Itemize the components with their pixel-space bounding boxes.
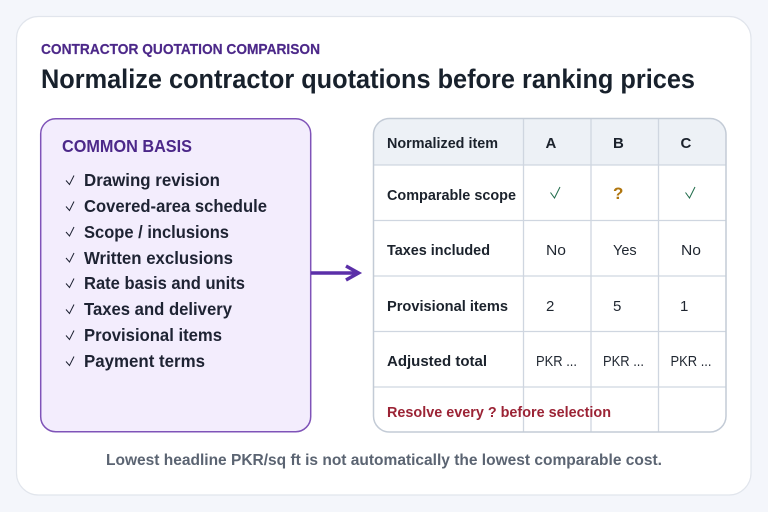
table header: Normalized item <box>387 136 498 152</box>
row: provisional items: 2 <box>546 298 554 315</box>
row: comparable scope: Comparable scope <box>387 188 516 204</box>
table header: C <box>680 135 692 152</box>
row: adjusted total: PKR ... <box>536 353 577 370</box>
footer note: Lowest headline PKR/sq ft is not automatically the lowest comparable cost. <box>106 452 662 469</box>
row: taxes included: Taxes included <box>387 243 490 259</box>
table header <box>387 135 692 152</box>
row: provisional items: 1 <box>680 298 688 315</box>
eyebrow heading: CONTRACTOR QUOTATION COMPARISON <box>41 41 320 58</box>
row: provisional items: 5 <box>613 298 621 315</box>
warning note: Resolve every ? before selection <box>387 405 611 421</box>
row: adjusted total: PKR ... <box>670 353 712 370</box>
row: taxes included: No <box>681 242 701 259</box>
row: provisional items <box>387 298 688 315</box>
panel: common basis <box>41 119 311 432</box>
checklist: Drawing revision <box>84 170 220 190</box>
checklist: Rate basis and units <box>84 273 245 293</box>
checklist: Written exclusions <box>84 248 233 268</box>
title: Normalize contractor quotations before ranking prices <box>41 64 695 94</box>
row: taxes included: No <box>546 242 566 259</box>
row: taxes included <box>387 242 701 259</box>
row: comparable scope <box>387 184 695 204</box>
checklist <box>66 170 267 371</box>
row: taxes included: Yes <box>613 243 637 259</box>
table header: A <box>546 135 556 152</box>
row: adjusted total: PKR ... <box>603 353 644 370</box>
checklist: Scope / inclusions <box>84 222 229 242</box>
table header: B <box>613 135 624 152</box>
row: provisional items: Provisional items <box>387 299 508 315</box>
panel heading: COMMON BASIS <box>62 136 192 156</box>
row: comparable scope: ? <box>613 184 623 203</box>
checklist: Payment terms <box>84 351 205 371</box>
checklist: Taxes and delivery <box>84 299 232 319</box>
row: adjusted total: Adjusted total <box>387 354 487 370</box>
comparison table <box>374 118 726 432</box>
checklist: Provisional items <box>84 325 222 345</box>
arrow <box>311 266 358 280</box>
checklist: Covered-area schedule <box>84 196 267 216</box>
row: adjusted total <box>387 353 712 370</box>
